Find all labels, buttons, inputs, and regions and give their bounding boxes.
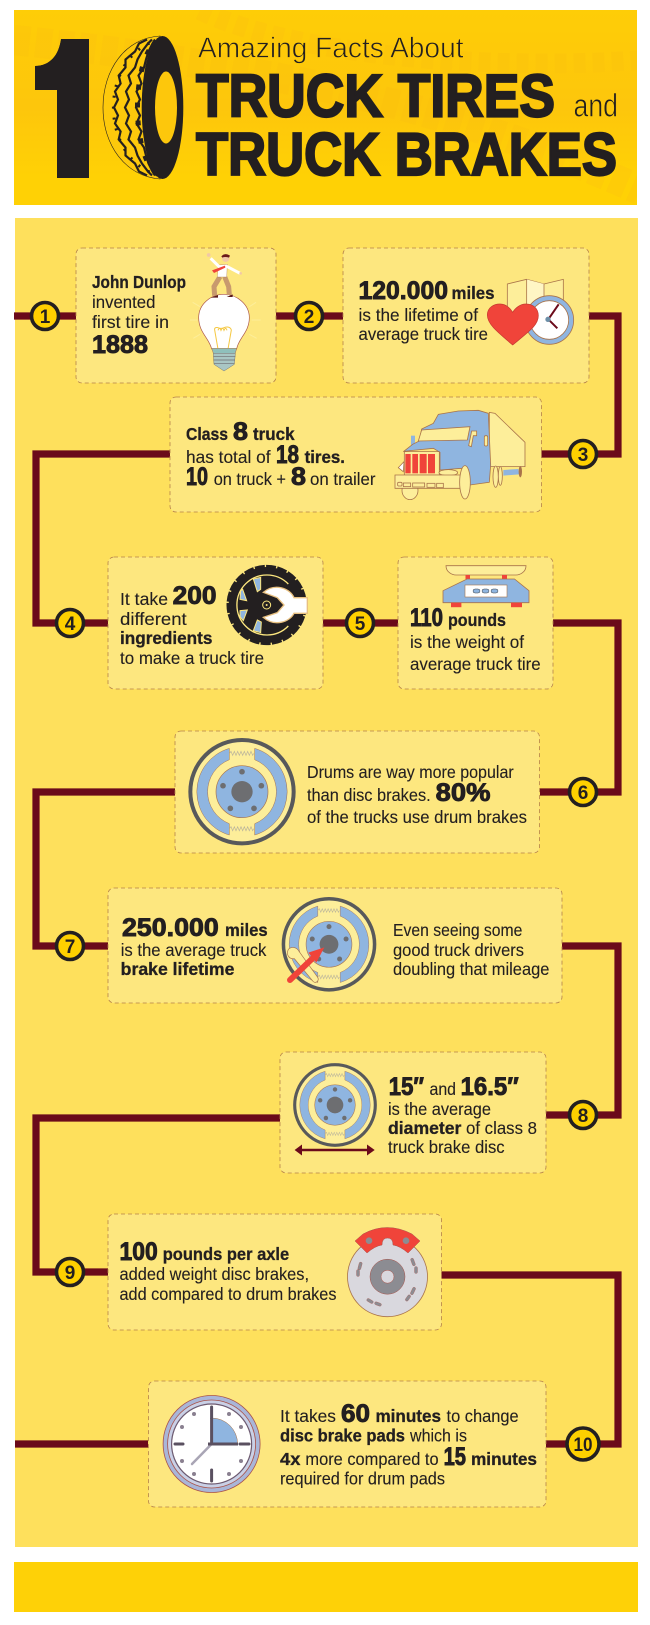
number badge 4: 4 [65,614,76,635]
number badge 1: 1 [40,307,51,328]
text: class 8 truck: on truck + [214,469,286,489]
text: even seeing some: doubling that mileage [393,959,549,979]
text: 110 pounds: average truck tire [410,654,541,674]
text: 15 and 16.5 inches: truck brake disc [388,1137,505,1157]
text: 15 and 16.5 inches: diameter [388,1118,462,1138]
connector: fact 10 exit [15,1440,148,1448]
icon: man on light bulb [190,253,261,371]
text: 100 pounds per axle: 100 [120,1238,158,1266]
text: 80 percent use drums: than disc brakes. [307,785,431,805]
text: 60 minutes vs 15 minutes: minutes [376,1406,441,1426]
text: class 8 truck [186,418,376,491]
number badge 5 [346,610,374,636]
text: 80 percent use drums: 80% [436,779,490,807]
text: 120.000 miles: 120.000 [358,277,448,305]
text: 60 minutes vs 15 minutes: to change [446,1406,519,1426]
text: 100 pounds per axle [120,1238,337,1304]
main panel background [15,218,638,1547]
heading: truck tires: TRUCK TIRES [196,62,555,130]
number badge 6: 6 [578,783,588,804]
text: 100 pounds per axle: pounds per axle [163,1244,289,1264]
icon: drum brake with diameter arrow [295,1065,375,1156]
connector: to fact 1 [14,312,76,320]
text: 250.000 miles: miles [225,920,268,940]
connector: fact 9 to fact 10 [441,1275,618,1444]
text: John Dunlop: first tire in [92,312,169,332]
icon: tire and wrench [228,566,307,644]
text: John Dunlop: 1888 [92,331,148,359]
heading: and: and [574,88,618,124]
number badge 2: 2 [304,307,314,328]
connector: fact 6 to fact 7 [36,792,175,946]
text: 120.000 miles: is the lifetime of [358,305,478,325]
number badge 2 [296,302,322,330]
text: 15 and 16.5 inches: 15″ [389,1073,424,1101]
text: 200 ingredients [120,582,264,668]
text: class 8 truck: 18 [276,441,299,469]
text: 60 minutes vs 15 minutes: required for drum pads [280,1469,445,1489]
text: even seeing some: good truck drivers [393,940,524,960]
icon: tire as numeral 0 [103,36,183,179]
text: 15 and 16.5 inches: 16.5″ [461,1073,519,1101]
number badge 7 [56,932,84,960]
text: 80 percent use drums: of the trucks use drum brakes [307,807,527,827]
text: 120.000 miles: average truck tire [358,324,488,344]
connector: fact 4 to fact 5 [323,619,398,627]
panel: fact 9 disc weight [108,1214,442,1330]
text: 200 ingredients: It take [120,589,168,609]
text: 110 pounds: 110 [410,604,443,632]
connector: fact 1 to fact 2 [276,312,343,320]
text: 250.000 miles: brake lifetime [121,959,235,979]
icon: map, clock and heart [487,279,574,345]
text: 60 minutes vs 15 minutes [280,1400,537,1489]
text: 110 pounds: pounds [448,610,506,630]
text: 60 minutes vs 15 minutes: 4x [280,1449,301,1469]
text: 250.000 miles: 250.000 [122,914,219,942]
text: John Dunlop: invented [92,292,156,312]
icon: wall clock [163,1396,260,1492]
text: class 8 truck: Class [186,424,228,444]
number badge 7: 7 [65,937,75,958]
text: class 8 truck: 10 [186,463,208,491]
footer band [14,1562,638,1612]
text: 15 and 16.5 inches: is the average [388,1099,491,1119]
text: 15 and 16.5 inches [388,1073,537,1157]
icon: drum brake [190,740,294,843]
text: 60 minutes vs 15 minutes: 15 [444,1443,466,1471]
text: 120.000 miles [358,277,495,344]
text: 60 minutes vs 15 minutes: It takes [280,1406,336,1426]
text: 15 and 16.5 inches: of class 8 [466,1118,537,1138]
text: even seeing some [393,920,549,979]
text: John Dunlop: John Dunlop [92,272,186,292]
text: class 8 truck: 8 [233,418,248,446]
panel: fact 1 John Dunlop [76,248,276,383]
text: even seeing some: Even seeing some [393,920,522,940]
number badge 9 [56,1258,84,1286]
text: 100 pounds per axle: add compared to drum brakes [120,1284,337,1304]
text: 200 ingredients: 200 [173,582,217,610]
number badge 5: 5 [355,614,366,635]
text: class 8 truck: on trailer [310,469,376,489]
panel: fact 8 diameter [280,1052,546,1173]
title numeral 1: 1 [15,0,127,221]
text: 60 minutes vs 15 minutes: disc brake pads [280,1426,405,1446]
number badge 8: 8 [578,1106,588,1127]
text: 60 minutes vs 15 minutes: more compared to [305,1449,439,1469]
panel: fact 4 ingredients [108,557,323,689]
number badge 1 [32,302,58,330]
text: class 8 truck: truck [253,424,295,444]
connector: fact 5 to fact 6 [540,623,618,792]
number badge 6 [570,778,596,806]
icon: weighing scale [443,566,529,607]
number badge 9: 9 [65,1263,75,1284]
number badge 10: 10 [574,1435,592,1456]
text: 120.000 miles: miles [452,283,495,303]
number badge 3: 3 [578,445,588,466]
text: 60 minutes vs 15 minutes: which is [409,1426,467,1446]
text: 250.000 miles [121,914,268,979]
text: 15 and 16.5 inches: and [430,1079,456,1099]
text: class 8 truck: has total of [186,447,271,467]
icon: semi truck [395,410,525,500]
text: class 8 truck: tires. [305,447,345,467]
text: 60 minutes vs 15 minutes: minutes [471,1449,537,1469]
heading: amazing facts: Amazing Facts About [198,32,464,64]
connector: fact 8 to fact 9 [36,1118,280,1272]
text: 80 percent use drums [307,762,527,827]
number badge 10 [567,1428,599,1460]
panel: fact 6 drums [175,731,540,853]
text: 60 minutes vs 15 minutes: 60 [341,1400,370,1428]
text: 200 ingredients: different [120,609,187,629]
header banner [14,10,637,205]
panel: fact 10 changing pads [148,1381,546,1507]
connector: fact 7 to fact 8 [546,946,618,1115]
text: 110 pounds: is the weight of [410,632,524,652]
text: 80 percent use drums: Drums are way more popular [307,762,514,782]
number badge 8 [570,1102,596,1128]
connector: fact 2 to fact 3 [541,316,618,454]
number badge 4 [56,610,84,636]
icon: drum brake with wrench [283,899,375,990]
panel: fact 7 brake lifetime [108,888,562,1003]
text: 110 pounds [410,604,541,674]
text: John Dunlop [92,272,186,359]
connector: fact 3 to fact 4 [36,454,170,623]
text: 100 pounds per axle: added weight disc brakes, [120,1264,309,1284]
text: 200 ingredients: to make a truck tire [120,648,264,668]
text: class 8 truck: 8 [291,463,306,491]
text: 200 ingredients: ingredients [120,628,213,648]
text: 250.000 miles: is the average truck [121,940,267,960]
number badge 3 [570,440,596,468]
icon: brake disc and caliper [348,1228,428,1317]
panel: fact 5 weight [398,557,553,689]
panel: fact 3 class 8 truck [170,397,542,512]
panel: fact 2 lifetime [343,248,589,383]
